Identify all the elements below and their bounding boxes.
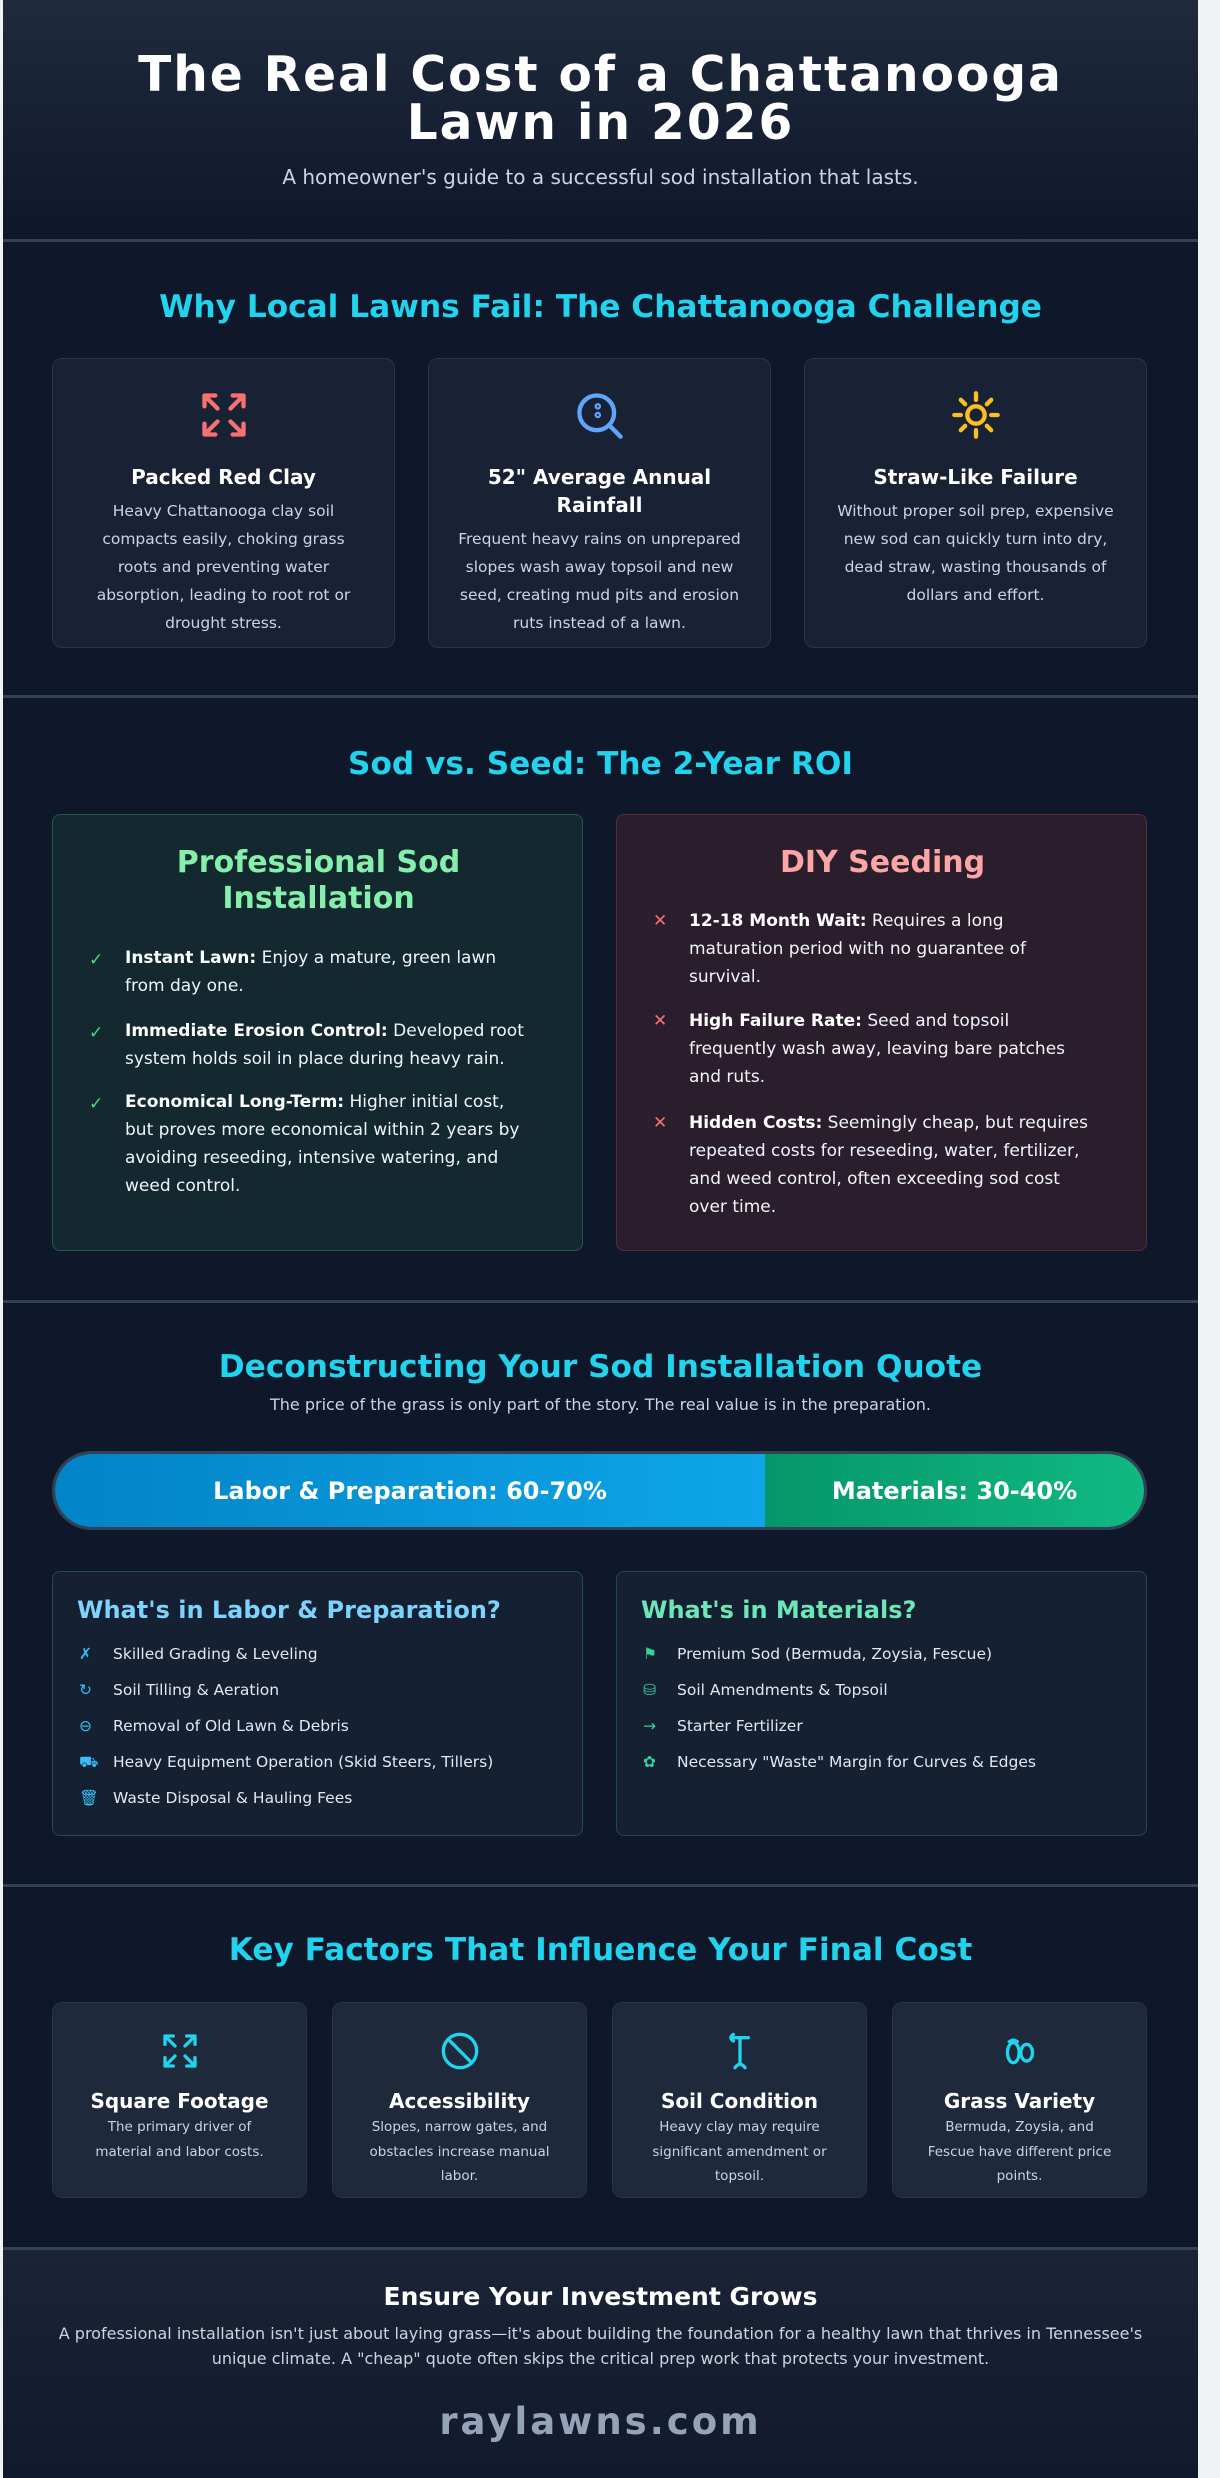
bar chart: cost split: Materials: 30-40%	[832, 1476, 1077, 1504]
item: economical: Economical Long-Term: Higher initial cost, but proves more economical within 2 years by avoiding reseeding, intensive watering, and weed control.	[125, 1092, 519, 1196]
card: square footage	[52, 2002, 307, 2198]
list items: →	[643, 1717, 656, 1735]
list items: Premium Sod (Bermuda, Zoysia, Fescue)	[677, 1645, 992, 1663]
item: instant lawn: Instant Lawn: Enjoy a mature, green lawn from day one.	[125, 948, 496, 996]
bar chart: cost split	[52, 1451, 1147, 1530]
card: soil condition	[612, 2002, 867, 2198]
card: rainfall: 52" Average Annual	[488, 465, 711, 489]
footer	[3, 2250, 1198, 2478]
card: packed red clay	[52, 358, 395, 648]
panel title: DIY Seeding	[780, 845, 985, 880]
list items: ↻	[79, 1681, 92, 1699]
section: sod vs seed	[52, 746, 1147, 1251]
brand: raylawns.com	[439, 2400, 762, 2443]
list items: Soil Tilling & Aeration	[113, 1681, 279, 1699]
footer title: Ensure Your Investment Grows	[384, 2282, 818, 2311]
subtitle: A homeowner's guide to a successful sod installation that lasts.	[282, 165, 919, 189]
item: hidden costs: ✕	[653, 1113, 667, 1133]
list items: ✿	[643, 1753, 656, 1771]
list items: Necessary "Waste" Margin for Curves & Edges	[677, 1753, 1036, 1771]
icon: shovel	[729, 2032, 750, 2070]
list items: Soil Amendments & Topsoil	[677, 1681, 888, 1699]
item: instant lawn: ✓	[89, 950, 103, 970]
panel title: Installation	[222, 881, 415, 916]
panel title: Professional Sod	[177, 845, 460, 880]
card: rainfall: Frequent heavy rains on unprepared slopes wash away topsoil and new seed, creating mud pits and erosion ruts instead of a lawn.	[458, 530, 741, 632]
list items: ✗	[79, 1645, 92, 1663]
section: key factors	[52, 1932, 1147, 2198]
card: soil condition: Heavy clay may require significant amendment or topsoil.	[652, 2119, 827, 2184]
item: wait: ✕	[653, 911, 667, 931]
item: failure rate: High Failure Rate: Seed and topsoil frequently wash away, leaving bare patches and ruts.	[689, 1011, 1065, 1087]
item: erosion: Immediate Erosion Control: Developed root system holds soil in place during heavy rain.	[125, 1021, 524, 1069]
panel: DIY seeding	[616, 814, 1147, 1251]
bar chart: cost split: Labor & Preparation: 60-70%	[213, 1476, 607, 1504]
icon: search drop	[577, 393, 623, 439]
item: economical: ✓	[89, 1094, 103, 1114]
icon: expand arrows	[202, 393, 246, 437]
card: grass variety	[892, 2002, 1147, 2198]
subheading: The price of the grass is only part of the story. The real value is in the preparation.	[270, 1395, 931, 1414]
title: The Real Cost of a Chattanooga	[138, 47, 1063, 103]
heading: Deconstructing Your Sod Installation Quote	[219, 1349, 982, 1385]
icon: expand	[163, 2034, 197, 2068]
card: accessibility	[332, 2002, 587, 2198]
card: accessibility: Slopes, narrow gates, and obstacles increase manual labor.	[370, 2119, 549, 2184]
list items: Removal of Old Lawn & Debris	[113, 1717, 349, 1735]
list items: 🗑	[79, 1789, 99, 1807]
header	[3, 0, 1198, 240]
card: straw-like failure	[804, 358, 1147, 648]
footer text: A professional installation isn't just about laying grass—it's about building the foundation for a healthy lawn that thrives in Tennessee's unique climate. A "cheap" quote often skips the critical prep work that protects your investment.	[59, 2324, 1142, 2368]
section: why local lawns fail	[52, 289, 1147, 648]
item: failure rate: ✕	[653, 1011, 667, 1031]
card: packed red clay: Packed Red Clay	[131, 465, 316, 489]
list items: ⛁	[643, 1681, 656, 1699]
panel title: What's in Materials?	[641, 1596, 916, 1624]
list items	[643, 1645, 1036, 1771]
icon: ban	[442, 2032, 478, 2070]
card: grass variety: Bermuda, Zoysia, and Fescue have different price points.	[928, 2119, 1111, 2184]
list items: ⊖	[79, 1717, 92, 1735]
card: accessibility: Accessibility	[389, 2089, 530, 2113]
card: soil condition: Soil Condition	[661, 2089, 818, 2113]
panel title: What's in Labor & Preparation?	[77, 1596, 501, 1624]
card: square footage: Square Footage	[90, 2089, 269, 2113]
list items: ⛟	[79, 1753, 98, 1771]
card: straw-like failure: Without proper soil prep, expensive new sod can quickly turn into dry, dead straw, wasting thousands of dollars and effort.	[837, 502, 1114, 604]
list items: Heavy Equipment Operation (Skid Steers, Tillers)	[113, 1753, 493, 1771]
card: grass variety: Grass Variety	[944, 2089, 1095, 2113]
item: erosion: ✓	[89, 1023, 103, 1043]
card: rainfall	[428, 358, 771, 648]
card: square footage: The primary driver of material and labor costs.	[95, 2119, 264, 2160]
icon: sun	[952, 391, 1000, 439]
list items: Waste Disposal & Hauling Fees	[113, 1789, 352, 1807]
title: Lawn in 2026	[407, 95, 794, 151]
panel: labor	[52, 1571, 583, 1836]
panel title	[177, 845, 460, 916]
item: wait: 12-18 Month Wait: Requires a long maturation period with no guarantee of survival.	[689, 911, 1026, 987]
panel: professional sod	[52, 814, 583, 1251]
item: hidden costs: Hidden Costs: Seemingly cheap, but requires repeated costs for reseeding, water, fertilizer, and weed control, often exceeding sod cost over time.	[689, 1113, 1088, 1217]
heading: Why Local Lawns Fail: The Chattanooga Challenge	[159, 289, 1042, 325]
icon: sprout	[1006, 2038, 1034, 2064]
card: straw-like failure: Straw-Like Failure	[873, 465, 1078, 489]
heading: Key Factors That Influence Your Final Cost	[229, 1932, 972, 1968]
card: packed red clay: Heavy Chattanooga clay soil compacts easily, choking grass roots and preventing water absorption, leading to root rot or drought stress.	[97, 502, 350, 632]
heading: Sod vs. Seed: The 2-Year ROI	[348, 746, 853, 782]
list items	[79, 1645, 493, 1807]
list items: Starter Fertilizer	[677, 1717, 803, 1735]
list items: Skilled Grading & Leveling	[113, 1645, 318, 1663]
title	[138, 47, 1063, 151]
list items: ⚑	[643, 1645, 657, 1663]
card: rainfall: Rainfall	[557, 493, 642, 517]
panel: materials	[616, 1571, 1147, 1836]
section: deconstructing quote	[52, 1349, 1147, 1836]
